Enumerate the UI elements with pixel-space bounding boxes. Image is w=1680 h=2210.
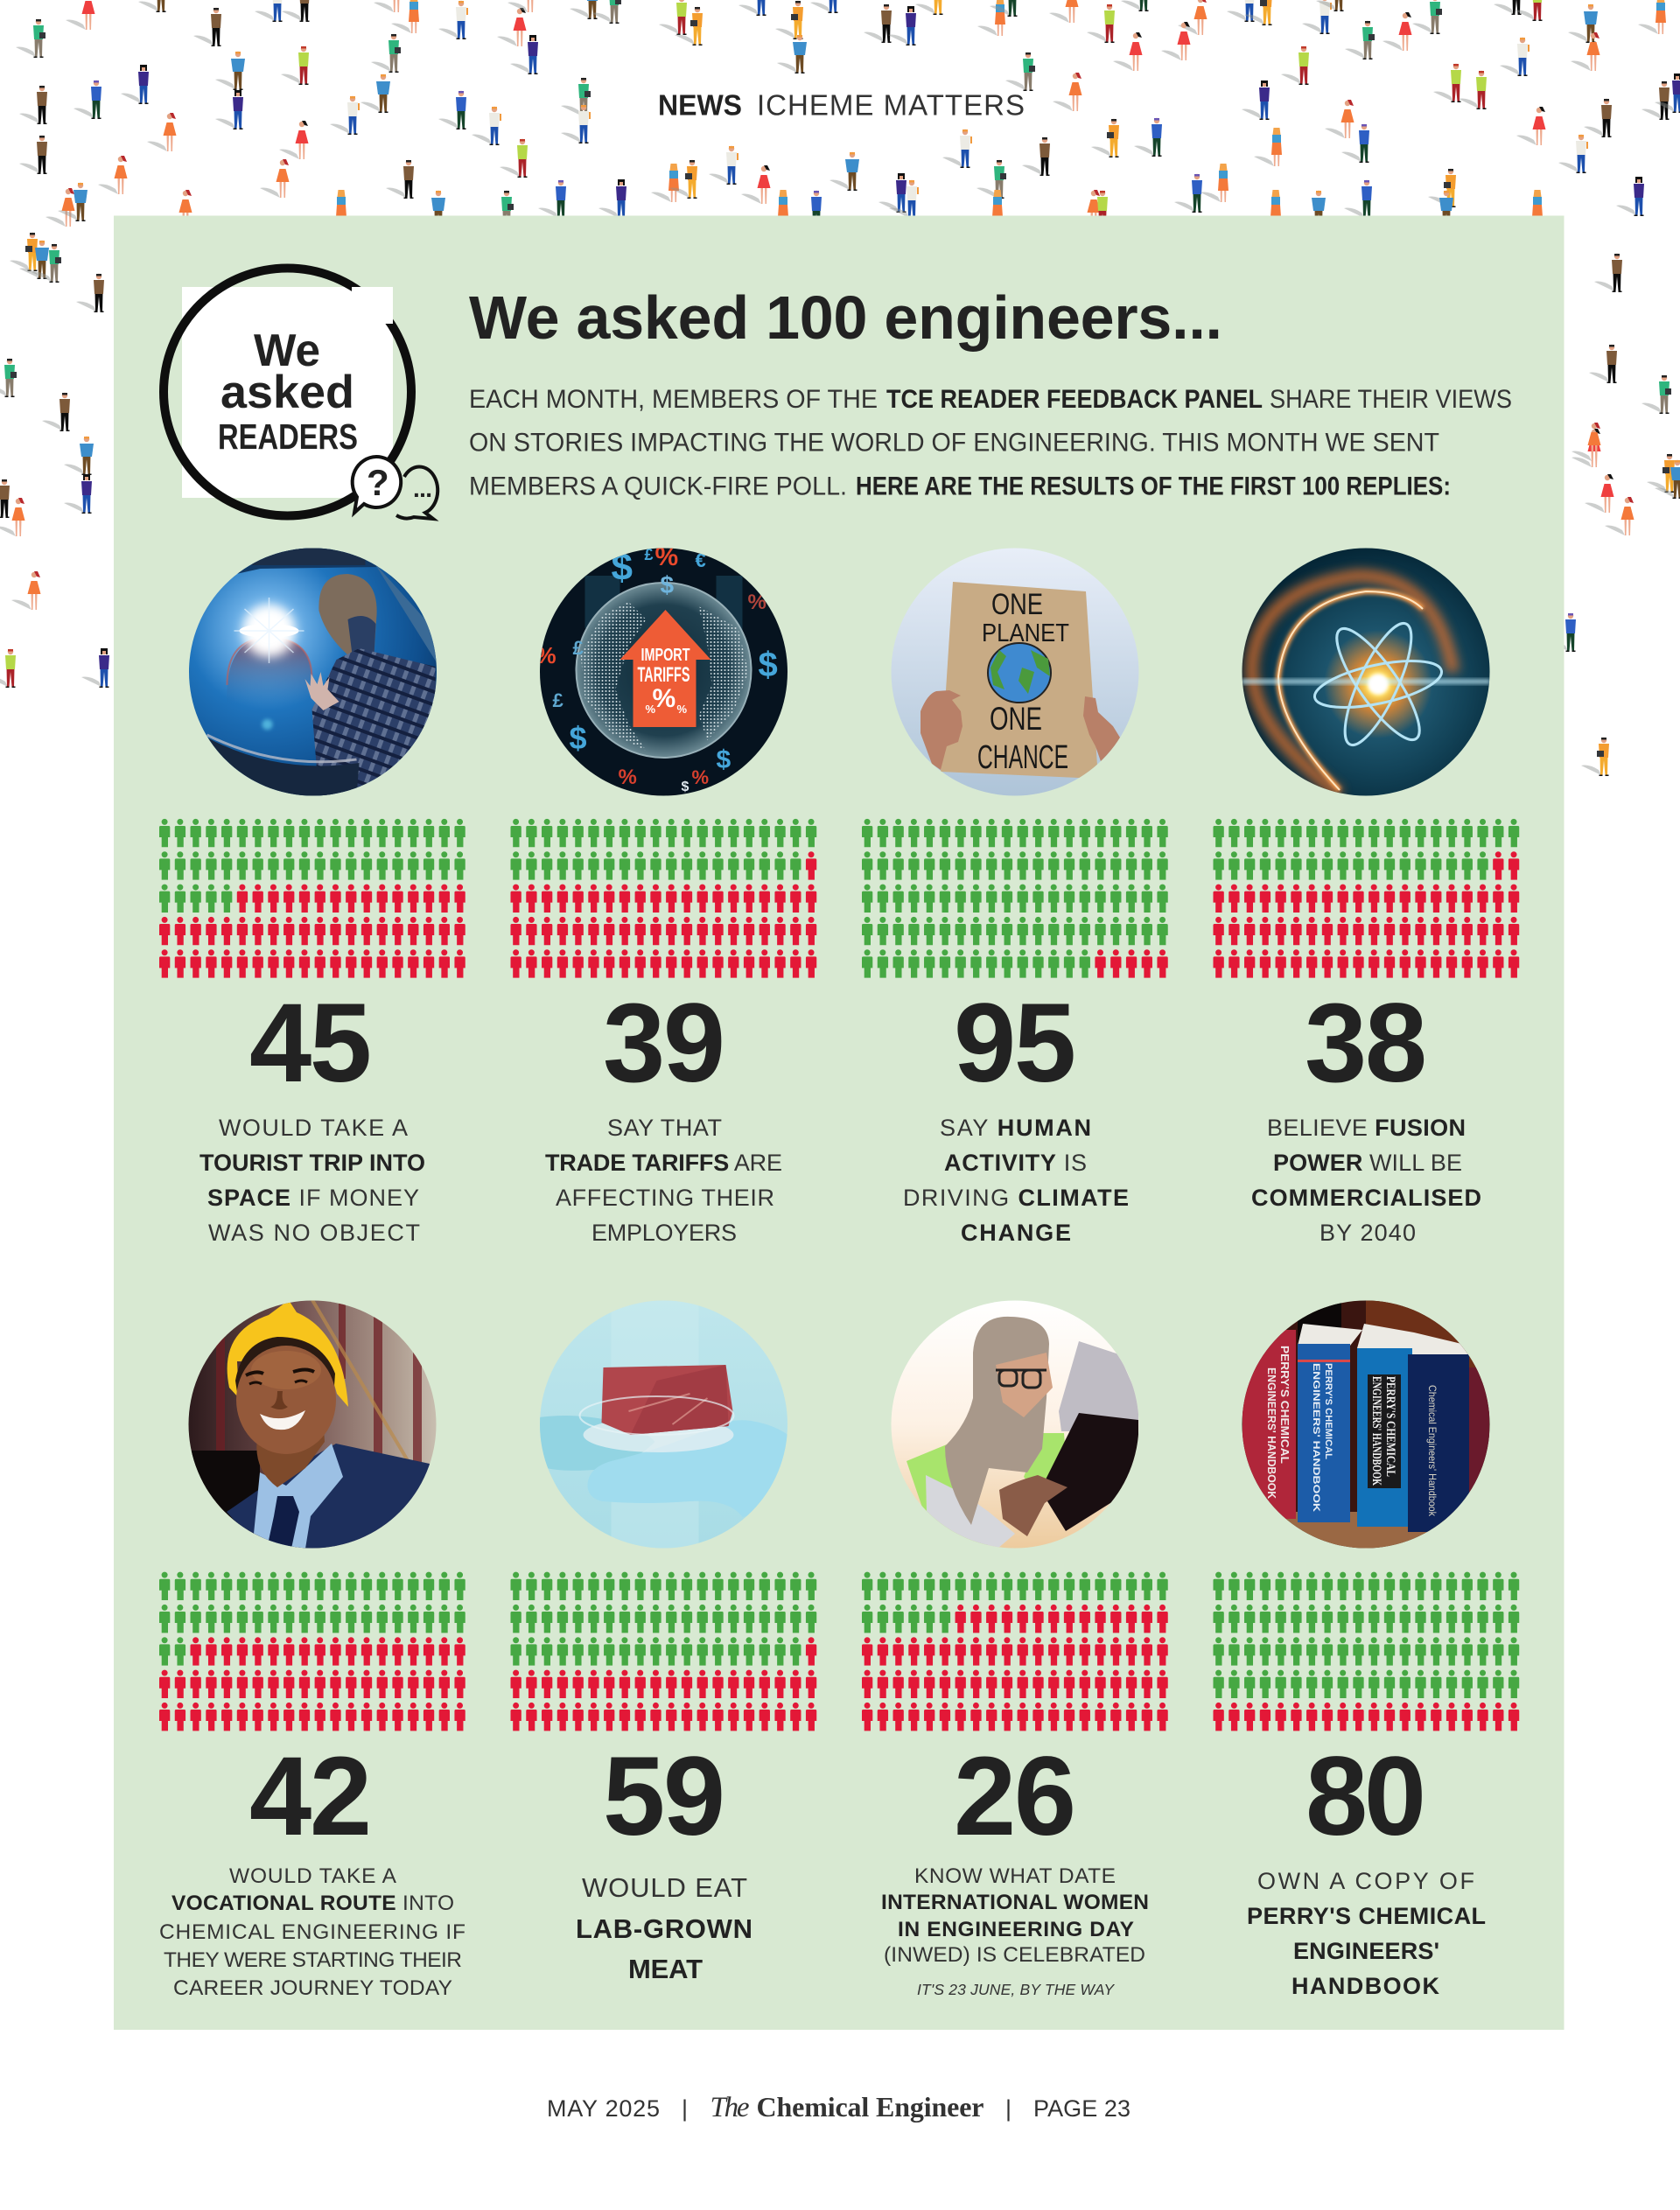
pictogram: 45 of 100 — [159, 819, 466, 978]
stat: 38 — [1251, 981, 1481, 1246]
stat: 26 — [881, 1734, 1149, 1998]
photo: import tariffs globe and arrow: $ — [660, 571, 674, 598]
book spine text: PERRY'S CHEMICAL — [1323, 1363, 1334, 1459]
stat: 59: 59 — [603, 1734, 725, 1859]
photo: import tariffs globe and arrow: $ — [569, 720, 587, 756]
book spine text: PERRY'S CHEMICAL — [1383, 1376, 1397, 1477]
logo: We asked readers: We — [254, 325, 320, 376]
stat: 95 — [903, 981, 1129, 1246]
green panel background — [114, 215, 1564, 2030]
stat: 59: WOULD EAT — [582, 1872, 747, 1903]
stat: 80: HANDBOOK — [1292, 1973, 1440, 1999]
photo: import tariffs globe and arrow: % — [747, 591, 766, 614]
stat: 39: 39 — [603, 981, 725, 1106]
stat: 38: BELIEVE FUSION — [1267, 1115, 1466, 1141]
footer: Chemical Engineer — [756, 2091, 984, 2123]
hand-drawn placard text: ONE — [990, 701, 1042, 737]
stat: 59: MEAT — [628, 1954, 703, 1984]
stat: 45 — [200, 981, 425, 1246]
photo: import tariffs globe and arrow: % — [653, 684, 676, 713]
section header: News IChemE Matters: ICHEME MATTERS — [757, 89, 1025, 121]
logo: We asked readers: READERS — [218, 416, 358, 457]
photo: import tariffs globe and arrow: % — [654, 542, 678, 571]
photo: import tariffs globe and arrow: IMPORT — [640, 646, 690, 665]
stat: 26: KNOW WHAT DATE — [914, 1864, 1116, 1888]
photo: import tariffs globe and arrow: $ — [681, 780, 690, 794]
pictogram: 80 of 100 — [1213, 1572, 1519, 1731]
icon: speech bubbles: ? — [367, 462, 389, 503]
stat: 42: THEY WERE STARTING THEIR — [164, 1948, 462, 1972]
footer: | — [1005, 2095, 1012, 2122]
stat: 26: (INWED) IS CELEBRATED — [884, 1943, 1145, 1967]
intro paragraph: SHARE THEIR VIEWS — [1270, 385, 1512, 414]
photo: Perry's Chemical Engineers' Handbooks — [1242, 1300, 1490, 1549]
photo: import tariffs globe and arrow: $ — [758, 646, 778, 684]
photo: fusion atom — [1242, 548, 1490, 796]
photo: import tariffs globe and arrow: % — [677, 703, 688, 716]
pictogram: 26 of 100 — [862, 1572, 1168, 1731]
book spine text: ENGINEERS' HANDBOOK — [1369, 1376, 1383, 1486]
pictogram: 38 of 100 — [1213, 819, 1519, 978]
book spine text: ENGINEERS' HANDBOOK — [1265, 1367, 1278, 1500]
hand-drawn placard text: CHANCE — [977, 739, 1068, 776]
pictogram: 95 of 100 — [862, 819, 1168, 978]
stat: 95: CHANGE — [961, 1220, 1071, 1246]
intro paragraph: ON STORIES IMPACTING THE WORLD OF ENGINEERING. THIS MONTH WE SENT — [469, 429, 1439, 457]
stat: 95: DRIVING CLIMATE — [903, 1185, 1129, 1211]
photo: lab-grown meat in petri dish — [539, 1300, 788, 1549]
hand-drawn placard text: PLANET — [982, 619, 1069, 647]
stat: 45: WOULD TAKE A — [219, 1115, 408, 1141]
background crowd of people — [0, 0, 1680, 776]
globe — [988, 643, 1051, 703]
pictogram: 59 of 100 — [511, 1572, 816, 1731]
stat: 39: TRADE TARIFFS ARE — [545, 1150, 782, 1176]
logo: We asked readers — [164, 268, 438, 519]
photo: import tariffs globe and arrow: % — [536, 642, 556, 668]
stat: 38: 38 — [1305, 981, 1427, 1106]
stat: 59: LAB-GROWN — [576, 1913, 752, 1944]
stat: 38: COMMERCIALISED — [1251, 1185, 1481, 1211]
intro paragraph: EACH MONTH, MEMBERS OF THE — [469, 385, 878, 414]
stat: 95: ACTIVITY IS — [944, 1150, 1087, 1176]
stat: 39: SAY THAT — [607, 1115, 722, 1141]
photo: import tariffs globe and arrow: £ — [572, 637, 584, 659]
stat: 95: 95 — [954, 981, 1076, 1106]
stat: 80: PERRY'S CHEMICAL — [1247, 1903, 1486, 1929]
book spine text: ENGINEERS' HANDBOOK — [1311, 1363, 1321, 1512]
photo: import tariffs globe and arrow: £ — [553, 689, 564, 711]
stat: 42: VOCATIONAL ROUTE INTO — [172, 1892, 454, 1915]
photo: import tariffs globe and arrow: £ — [644, 546, 654, 563]
photo: import tariffs globe and arrow — [536, 542, 788, 796]
stat: 95: SAY HUMAN — [940, 1115, 1091, 1141]
photo: smiling engineer in hard hat — [188, 1300, 437, 1556]
stat: 42: CAREER JOURNEY TODAY — [173, 1976, 452, 2000]
photo: import tariffs globe and arrow: € — [695, 549, 706, 571]
logo: We asked readers: asked — [220, 367, 354, 418]
footer: MAY 2025 — [547, 2095, 660, 2122]
stat: 45: TOURIST TRIP INTO — [200, 1150, 425, 1176]
section header: News IChemE Matters: NEWS — [658, 89, 742, 121]
stat: 45: WAS NO OBJECT — [208, 1220, 420, 1246]
pictogram: 39 of 100 — [511, 819, 816, 978]
stat: 39: EMPLOYERS — [592, 1220, 737, 1246]
book spine text — [1265, 1346, 1438, 1517]
intro paragraph: TCE READER FEEDBACK PANEL — [886, 385, 1263, 414]
photo: import tariffs globe and arrow: TARIFFS — [637, 663, 690, 687]
hand-drawn placard text — [977, 588, 1069, 776]
stat: 26: INTERNATIONAL WOMEN — [881, 1891, 1149, 1914]
photo: import tariffs globe and arrow: $ — [716, 745, 732, 774]
stat: 38: POWER WILL BE — [1273, 1150, 1462, 1176]
stat: 80: OWN A COPY OF — [1257, 1868, 1474, 1894]
stat: 45: 45 — [249, 981, 372, 1106]
icon: speech bubbles — [353, 457, 438, 519]
stat: 26: 26 — [954, 1734, 1076, 1859]
stat: 39 — [545, 981, 782, 1246]
footer: The — [710, 2092, 749, 2123]
hand-drawn placard text: ONE — [991, 588, 1043, 621]
photo: One Planet One Chance placard — [891, 548, 1139, 796]
stat: 26: IN ENGINEERING DAY — [898, 1918, 1134, 1941]
stat: 80: 80 — [1306, 1734, 1426, 1859]
stat: 42 — [159, 1734, 466, 2000]
stat: 80 — [1247, 1734, 1486, 1999]
footer — [547, 2091, 1130, 2123]
stat: 59 — [576, 1734, 752, 1984]
photo: import tariffs globe and arrow: $ — [611, 546, 633, 589]
pictogram: 42 of 100 — [159, 1572, 466, 1731]
photo: tourist in spacecraft looking at Earth — [189, 548, 438, 796]
intro paragraph: MEMBERS A QUICK-FIRE POLL. — [469, 472, 847, 500]
stat: 38: BY 2040 — [1320, 1220, 1416, 1246]
stat: 42: CHEMICAL ENGINEERING IF — [159, 1920, 466, 1944]
icon: speech bubbles: ... — [413, 475, 432, 502]
stat: 42: WOULD TAKE A — [229, 1864, 397, 1888]
intro paragraph: HERE ARE THE RESULTS OF THE FIRST 100 REPLIES: — [856, 472, 1451, 500]
stat: 45: SPACE IF MONEY — [207, 1185, 419, 1211]
intro paragraph — [469, 385, 1512, 500]
stat: 26: IT'S 23 JUNE, BY THE WAY — [917, 1981, 1115, 1998]
photo: woman in hijab and hi-vis vest — [891, 1300, 1139, 1549]
footer: PAGE 23 — [1033, 2095, 1130, 2122]
photo: import tariffs globe and arrow: % — [691, 766, 709, 788]
photo: import tariffs globe and arrow: % — [618, 766, 637, 789]
photo: import tariffs globe and arrow: % — [646, 703, 656, 716]
book spine text: Chemical Engineers' Handbook — [1426, 1385, 1438, 1517]
stat: 39: AFFECTING THEIR — [556, 1185, 774, 1211]
book spine text: PERRY'S CHEMICAL — [1278, 1346, 1292, 1464]
stat: 80: ENGINEERS' — [1293, 1938, 1439, 1964]
footer: | — [682, 2095, 688, 2122]
stat: 42: 42 — [249, 1734, 372, 1859]
title: We asked 100 engineers... — [469, 283, 1222, 352]
